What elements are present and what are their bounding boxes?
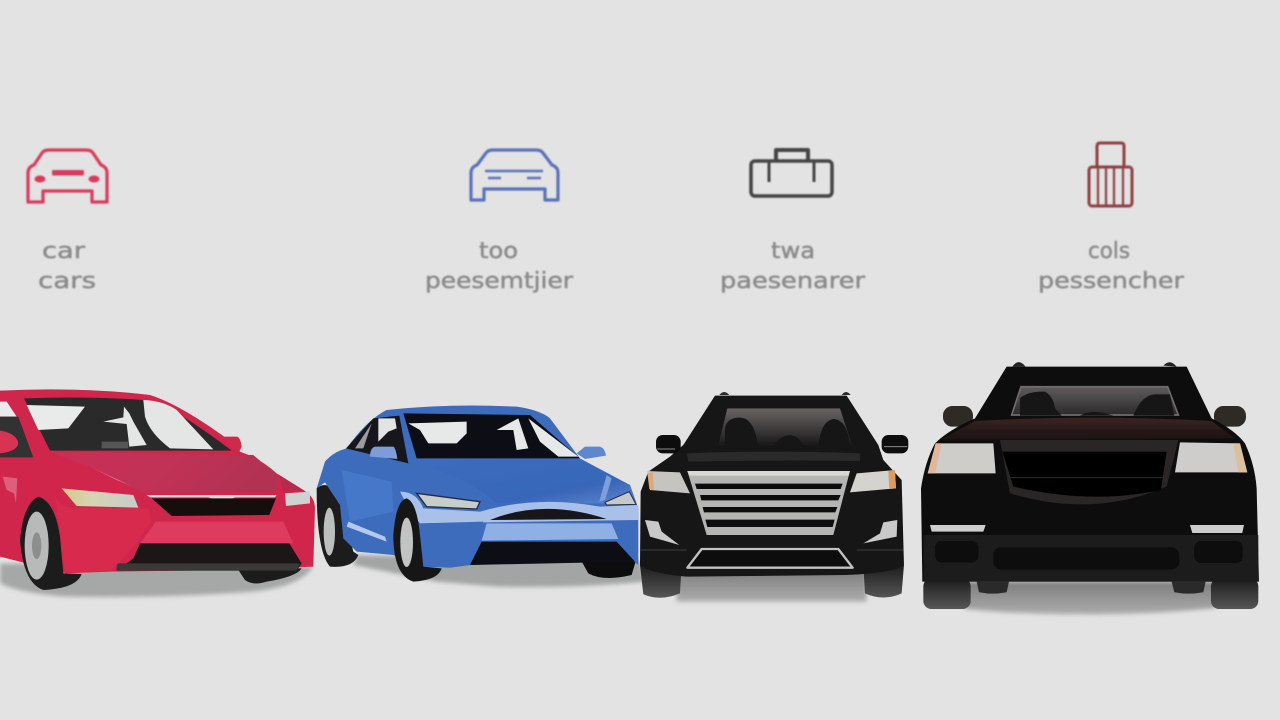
shadow — [965, 582, 1215, 614]
roof rails — [1012, 362, 1177, 367]
body — [317, 406, 638, 568]
bumper — [923, 535, 1258, 582]
label: car cars: cars — [38, 269, 96, 294]
marker strips — [930, 525, 986, 532]
windshield — [717, 408, 853, 449]
body — [640, 396, 904, 577]
label: car cars: car — [42, 239, 86, 264]
side mirrors — [656, 435, 681, 453]
fender — [422, 522, 483, 568]
shadow — [677, 570, 867, 602]
headlights — [62, 488, 138, 508]
grille — [147, 495, 277, 497]
chrome grille — [687, 471, 850, 535]
vehicle: black SUV — [640, 392, 908, 602]
lower bumper — [140, 522, 293, 543]
label: cols passenger: pessencher — [1038, 269, 1185, 294]
intake — [470, 542, 635, 565]
hood — [50, 452, 278, 493]
windshield — [403, 413, 580, 458]
icon: blue car — [471, 150, 558, 200]
headlights — [928, 443, 996, 473]
seats — [1020, 392, 1174, 416]
icon: red car — [28, 150, 107, 202]
mirrors — [943, 406, 973, 427]
wheels — [923, 578, 971, 609]
label: twa passenger — [720, 239, 866, 294]
fog lights — [645, 520, 679, 545]
grille — [490, 509, 607, 520]
label: cols passenger: cols — [1088, 239, 1130, 264]
labels row — [38, 239, 1185, 294]
front wheel — [393, 498, 442, 582]
windshield — [24, 397, 232, 451]
headlights — [417, 493, 480, 509]
label: cols passenger — [1038, 239, 1185, 294]
icons row — [28, 143, 1132, 206]
trims — [347, 522, 387, 542]
side mirrors — [370, 447, 397, 459]
label: twa passenger: paesenarer — [720, 269, 866, 294]
lower bar — [482, 523, 618, 541]
label: twa passenger: twa — [771, 239, 815, 264]
label: car cars — [38, 239, 96, 294]
body — [0, 389, 315, 573]
vehicle: blue car — [317, 406, 645, 587]
shadow — [0, 563, 313, 597]
front wheel — [20, 497, 82, 590]
icon: luggage — [1089, 143, 1132, 206]
bumper vents — [935, 541, 978, 562]
side mirrors — [0, 431, 18, 453]
hood — [410, 459, 635, 503]
headlights — [647, 471, 690, 493]
side window — [0, 402, 17, 417]
grille — [1000, 440, 1178, 504]
vehicle: red car — [0, 389, 315, 597]
side window — [346, 416, 408, 463]
vehicle: large black SUV — [921, 362, 1259, 614]
label: too passenger — [425, 239, 574, 294]
hood crease — [687, 452, 860, 462]
roof rails — [719, 392, 851, 395]
label: too passenger: too — [479, 239, 518, 264]
far wheel — [237, 568, 302, 583]
seats — [725, 418, 850, 448]
label: too passenger: peesemtjier — [425, 269, 574, 294]
wheels — [640, 565, 904, 598]
lower chrome intake — [687, 549, 853, 568]
body — [921, 367, 1259, 582]
icon: briefcase — [751, 150, 832, 196]
far wheel — [580, 558, 637, 578]
rear wheel — [317, 485, 358, 567]
hood — [938, 418, 1235, 441]
shadow — [353, 555, 645, 587]
windshield — [1012, 387, 1178, 415]
